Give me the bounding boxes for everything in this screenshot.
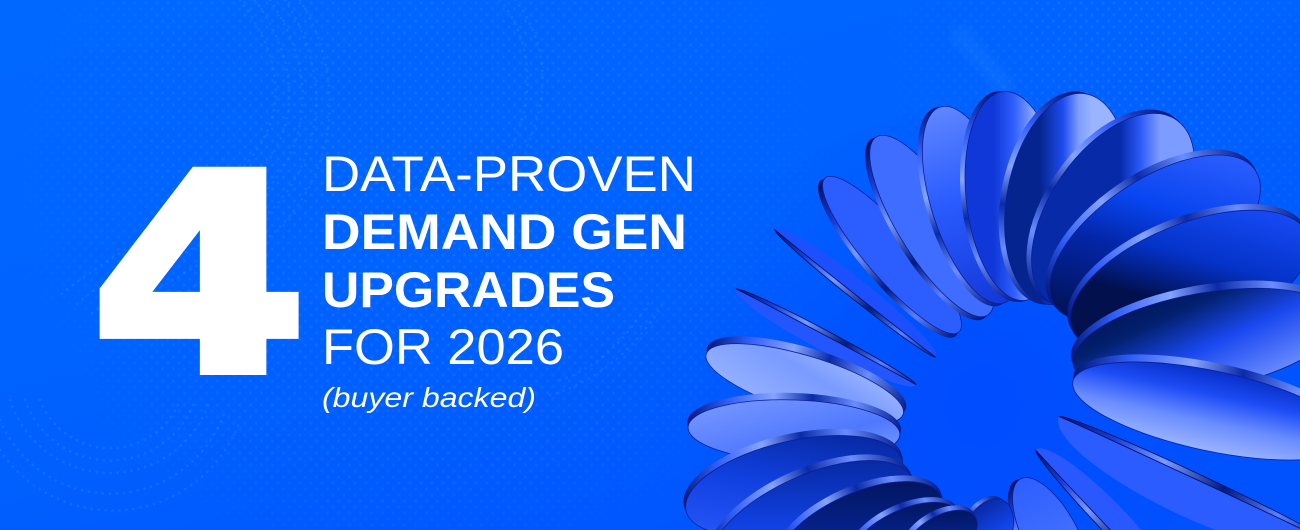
disc M	[1043, 410, 1300, 530]
disc U	[759, 453, 959, 530]
disc J	[1047, 174, 1300, 384]
subtitle: (buyer backed)	[322, 382, 536, 413]
disc Q	[697, 319, 915, 441]
disc N	[1031, 435, 1196, 530]
disc P	[947, 488, 1024, 530]
heading line: for 2026: FOR 2026	[322, 319, 564, 375]
disc L	[1064, 334, 1300, 480]
spiral ring of discs	[683, 91, 1300, 530]
disc K	[1063, 262, 1300, 412]
heading	[322, 146, 696, 375]
disc A	[729, 284, 919, 397]
disc B	[771, 218, 944, 362]
big numeral 4: 4	[91, 117, 307, 434]
disc C	[802, 161, 978, 352]
heading line: data-proven: DATA-PROVEN	[322, 146, 696, 202]
heading line: upgrades: UPGRADES	[322, 262, 615, 318]
disc S	[673, 410, 913, 530]
disc G	[982, 81, 1145, 316]
disc H	[993, 80, 1228, 338]
disc W	[890, 493, 988, 530]
disc R	[686, 389, 902, 466]
disc E	[897, 94, 1042, 318]
heading line: demand gen: DEMAND GEN	[322, 204, 687, 260]
disc I	[1018, 116, 1289, 354]
disc V	[837, 482, 972, 530]
disc F	[950, 86, 1073, 307]
disc O	[992, 465, 1108, 530]
disc T	[690, 428, 932, 530]
disc D	[844, 119, 1016, 336]
